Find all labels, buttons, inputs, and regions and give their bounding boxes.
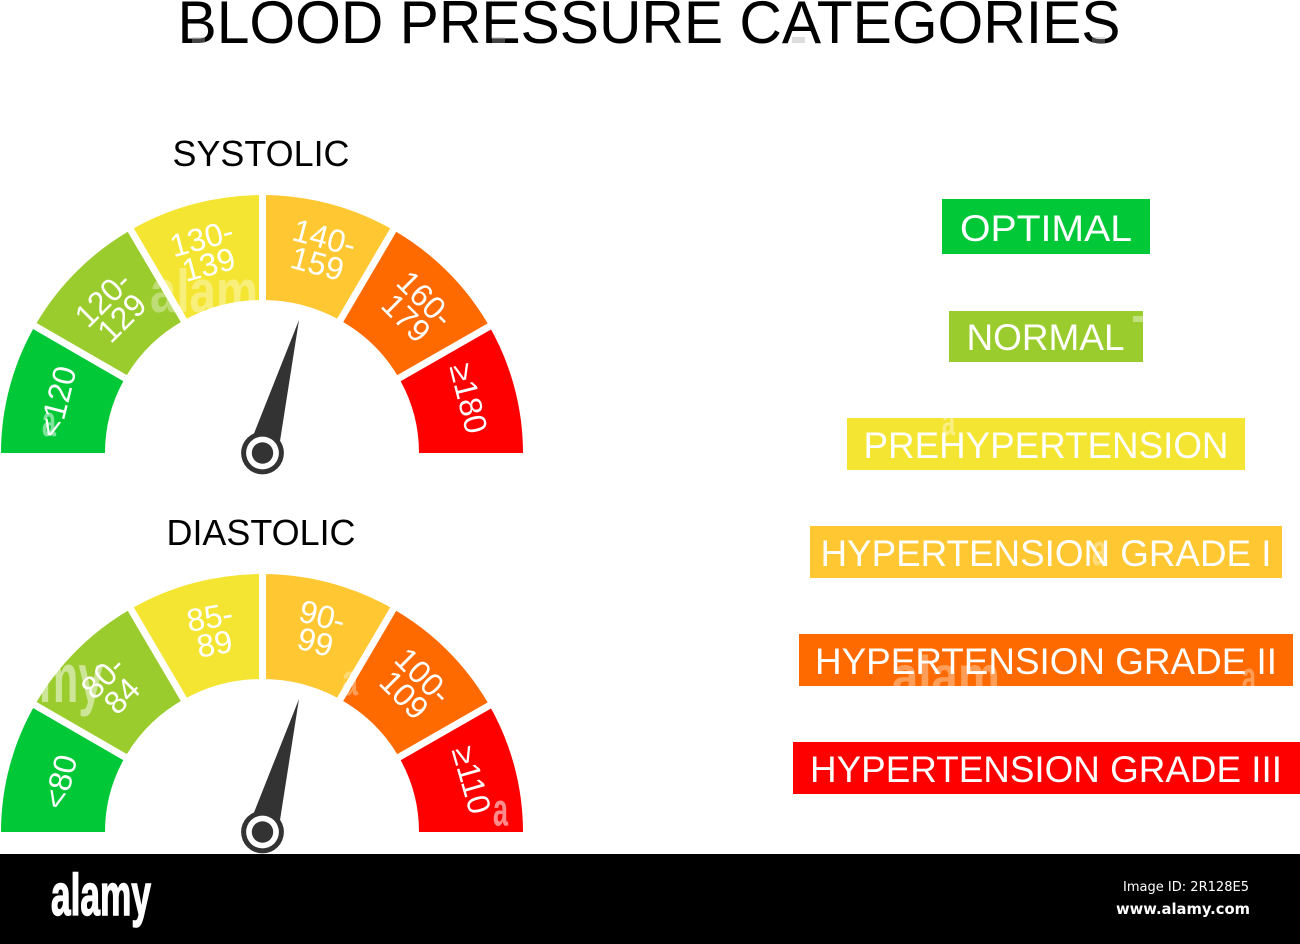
label: 100-109: 109 (372, 663, 436, 727)
segment: 110 and over (398, 703, 523, 832)
segment: 160-179 (340, 230, 488, 376)
label: under 80: <80 (36, 751, 84, 813)
gauge: diastolic: a (342, 656, 358, 705)
footer bar (0, 854, 1300, 944)
label: 180 and over: ≥180 (443, 360, 495, 437)
label: 85-89 (184, 595, 240, 666)
segment: 100-109 (340, 609, 488, 756)
label: 100-109: 100- (388, 640, 459, 711)
segment: under 120 (1, 324, 126, 453)
label: 90-99: 99 (294, 620, 337, 664)
legend: hypertension grade I: a (1092, 526, 1107, 575)
gauge: diastolic: my (39, 639, 103, 717)
label: 140-159: 140- (289, 212, 360, 263)
label: 130-139 (166, 213, 244, 290)
legend: hypertension grade II (790, 634, 1300, 707)
legend: normal: NORMAL (966, 317, 1124, 358)
label: 120-129 (67, 263, 157, 353)
segment: 140-159 (262, 195, 392, 320)
legend: hypertension grade III: HYPERTENSION GRADE III (810, 749, 1282, 790)
gauge: systolic: a (42, 397, 56, 446)
label: 110 and over: ≥110 (445, 742, 498, 818)
legend: hypertension grade II: HYPERTENSION GRADE II (815, 641, 1277, 682)
segment: 85-89 (132, 574, 262, 700)
label: 80-84: 84 (97, 671, 147, 721)
label: 140-159: 159 (287, 239, 348, 288)
segment: under 80 (1, 703, 126, 832)
needle (241, 320, 299, 474)
label: 85-89: 89 (194, 623, 235, 665)
legend: optimal (942, 199, 1150, 254)
gauge: systolic: alam (150, 258, 258, 325)
label: 85-89: 85- (184, 595, 236, 639)
heading: diastolic: DIASTOLIC (166, 512, 356, 553)
label: 160-179: 160- (390, 263, 461, 334)
segment: 180 and over (398, 324, 523, 453)
legend: hypertension grade II: a (1242, 653, 1256, 702)
gauge: diastolic (1, 564, 523, 853)
label: 160-179 (371, 263, 461, 353)
label: 90-99 (288, 593, 349, 665)
label: under 120: <120 (31, 363, 84, 441)
gauge: diastolic: a (493, 784, 508, 836)
needle (241, 699, 299, 853)
heading: systolic: SYSTOLIC (172, 133, 350, 174)
segment: 120-129 (36, 230, 184, 376)
label: 130-139: 130- (166, 213, 237, 264)
label: 160-179: 179 (374, 286, 438, 350)
legend: hypertension grade I: HYPERTENSION GRADE I (820, 533, 1272, 574)
label: 120-129: 120- (67, 263, 138, 334)
legend: normal (949, 311, 1143, 362)
legend: prehypertension: a (942, 400, 955, 444)
label: 80-84: 80- (74, 648, 132, 706)
label: 90-99: 90- (295, 593, 349, 639)
label: 120-129: 129 (90, 286, 154, 350)
legend: optimal: OPTIMAL (960, 208, 1132, 249)
footer image id: Image ID: 2R128E5 (1123, 880, 1249, 895)
legend: hypertension grade II: alam (892, 644, 1000, 707)
legend: prehypertension (847, 400, 1245, 470)
label: 140-159 (282, 212, 360, 289)
legend: prehypertension: PREHYPERTENSION (864, 425, 1228, 466)
segment: 130-139 (132, 195, 262, 320)
segment: 80-84 (36, 609, 184, 756)
label: 100-109 (369, 640, 459, 730)
label: 80-84 (74, 648, 151, 725)
gauge: systolic (1, 185, 523, 474)
footer website: www.alamy.com (1116, 900, 1250, 918)
footer logo: alamy (51, 863, 151, 928)
segment: 90-99 (262, 574, 392, 700)
label: 130-139: 139 (178, 240, 239, 289)
